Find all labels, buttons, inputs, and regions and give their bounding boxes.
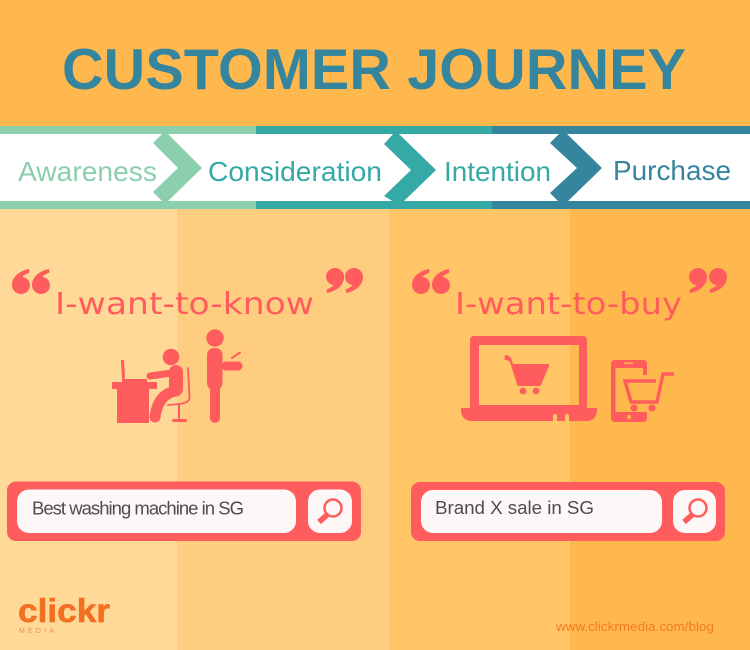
quote: I-want-to-know xyxy=(12,268,363,322)
icon: opening quote mark xyxy=(12,269,50,294)
icon: magnifier xyxy=(319,500,342,522)
icon: laptop with shopping cart xyxy=(461,336,597,421)
arrow: consideration chevron xyxy=(384,133,436,202)
logo: clickr media: MEDIA xyxy=(19,628,54,635)
quote text: I-want-to-know xyxy=(55,287,314,322)
icon: phone with shopping cart xyxy=(611,360,674,422)
website url: www.clickrmedia.com/blog xyxy=(555,619,714,634)
icon: closing quote mark xyxy=(689,268,727,293)
panel: purchase column xyxy=(570,209,750,650)
arrow: intention chevron xyxy=(550,133,602,202)
search bar: brand x sale xyxy=(411,482,725,541)
title: CUSTOMER JOURNEY xyxy=(62,38,686,102)
logo: clickr media: clickr xyxy=(18,592,110,629)
panel: intention column xyxy=(389,209,570,650)
icon: closing quote mark xyxy=(326,268,363,293)
journey stage banner xyxy=(0,126,750,209)
icon: magnifier xyxy=(684,500,706,522)
quote text: I-want-to-buy xyxy=(455,287,682,322)
label: consideration: Consideration xyxy=(208,156,382,187)
search bar: best washing machine xyxy=(7,482,361,541)
label: intention: Intention xyxy=(444,156,551,187)
search text: Best washing machine in SG xyxy=(32,498,244,518)
search text: Brand X sale in SG xyxy=(435,497,594,518)
quote: I-want-to-buy xyxy=(412,268,727,322)
icon: person at desk and standing person xyxy=(112,329,240,423)
icon: opening quote mark xyxy=(412,269,450,294)
label: purchase: Purchase xyxy=(613,155,731,186)
arrow: awareness chevron xyxy=(153,133,202,202)
panel: awareness column xyxy=(0,209,177,650)
panel: consideration column xyxy=(177,209,389,650)
label: awareness: Awareness xyxy=(18,156,157,187)
